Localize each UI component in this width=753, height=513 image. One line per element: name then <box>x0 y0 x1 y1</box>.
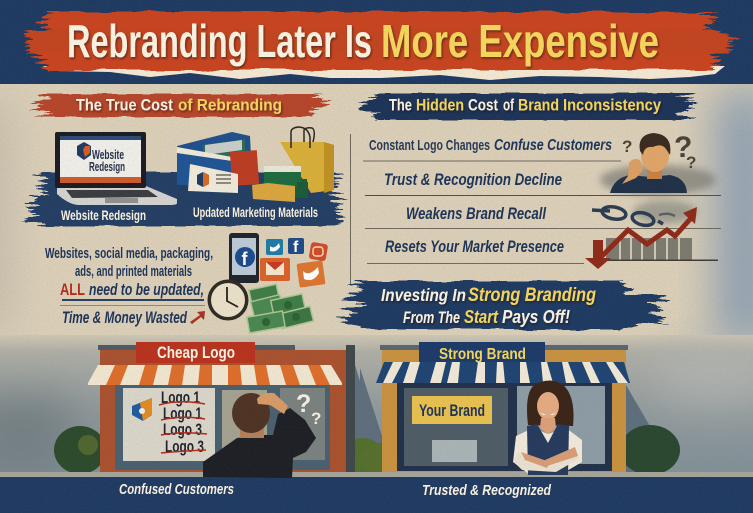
ground strip <box>0 472 753 478</box>
heading: hidden cost: Brand <box>518 96 559 114</box>
icon: red arrow <box>190 311 205 324</box>
text block: what needs updating: Time & Money Wasted <box>62 308 187 327</box>
store: cheap logo: ? <box>296 390 311 418</box>
text block: what needs updating: ads, and printed materials <box>75 264 192 280</box>
icon: phone <box>229 233 259 283</box>
list: hidden costs <box>363 137 721 264</box>
person: confident owner <box>513 380 582 475</box>
callout: invest in branding: Pays Off! <box>502 307 570 327</box>
icon: confused man: ? <box>686 153 696 172</box>
store: cheap logo: ? <box>311 409 321 428</box>
icon: confused man: ? <box>622 137 632 156</box>
list: hidden costs: Trust & Recognition Decline <box>384 171 562 189</box>
label: website redesign: Website Redesign <box>61 207 146 223</box>
sign: your brand <box>412 396 492 424</box>
icon: crossed logos <box>132 388 207 456</box>
chart: declining arrow <box>585 207 718 269</box>
icons: social media <box>260 238 328 288</box>
heading: true cost: of Rebranding <box>178 96 282 114</box>
icon: laptop: Redesign <box>89 159 125 174</box>
title: Rebranding Later Is <box>67 15 372 67</box>
icon: money <box>247 284 313 333</box>
person: confused customer <box>203 393 316 478</box>
label: updated marketing materials: Updated Marketing Materials <box>193 204 318 220</box>
icon: crossed logos: Logo 3 <box>163 420 202 439</box>
sign: cheap logo: Cheap Logo <box>157 343 235 362</box>
icon: clock <box>208 280 248 320</box>
list: hidden costs: Confuse Customers <box>494 137 612 154</box>
bushes <box>54 425 680 475</box>
icon: broken chain <box>592 200 697 227</box>
sign: strong brand: Strong Brand <box>439 346 526 363</box>
caption: trusted and recognized: Trusted & Recognized <box>422 483 552 499</box>
building shadows <box>355 365 660 472</box>
awning <box>88 365 342 385</box>
heading: hidden cost: The <box>389 96 412 114</box>
icon: confused man <box>600 131 716 195</box>
sign: your brand: Your Brand <box>419 401 485 420</box>
bottom navy band <box>0 477 753 513</box>
heading: hidden cost: Inconsistency <box>563 96 661 114</box>
icon: laptop: Website <box>92 147 124 162</box>
icon: crossed logos: Logo 1 <box>163 404 202 423</box>
heading: hidden cost <box>366 93 692 120</box>
icon: crossed logos: Logo 1 <box>161 388 200 407</box>
icon: laptop <box>55 132 177 205</box>
text block: what needs updating: ALL <box>60 280 85 299</box>
list: hidden costs: Constant Logo Changes <box>369 137 490 154</box>
text block: what needs updating: need to be updated, <box>89 280 204 299</box>
panel: true cost navy brush <box>30 172 340 226</box>
icon: crossed logos: Logo 3 <box>165 437 204 456</box>
heading: true cost: The True Cost <box>76 96 173 114</box>
heading: hidden cost: Cost <box>468 96 498 114</box>
column divider <box>350 134 351 284</box>
top navy band <box>0 0 753 84</box>
awning <box>376 362 630 383</box>
title brush <box>30 12 730 70</box>
heading: true cost <box>36 94 326 117</box>
callout: invest in branding: From The <box>403 308 460 327</box>
icon: phone: f <box>242 249 248 269</box>
heading: hidden cost: of <box>503 96 514 114</box>
callout: invest in branding: Investing In <box>381 285 466 305</box>
callout: invest in branding: Start <box>464 307 499 327</box>
icon: confused man: ? <box>674 131 692 164</box>
store: strong brand <box>376 342 630 472</box>
heading: hidden cost: Hidden <box>416 96 464 114</box>
callout: invest in branding <box>352 281 662 329</box>
text block: what needs updating: Websites, social media, packaging, <box>45 245 213 262</box>
callout: invest in branding: Strong Branding <box>468 285 596 306</box>
list: hidden costs: Weakens Brand Recall <box>406 205 546 223</box>
text block: what needs updating <box>45 245 213 327</box>
icon: marketing materials <box>177 127 334 202</box>
list: hidden costs: Resets Your Market Presence <box>385 238 564 256</box>
icons: social media: f <box>293 239 299 256</box>
title: More Expensive <box>381 15 659 67</box>
sign: strong brand <box>419 342 545 363</box>
store: cheap logo <box>88 342 355 473</box>
caption: confused customers: Confused Customers <box>119 482 234 498</box>
torn paper strip <box>42 66 725 80</box>
